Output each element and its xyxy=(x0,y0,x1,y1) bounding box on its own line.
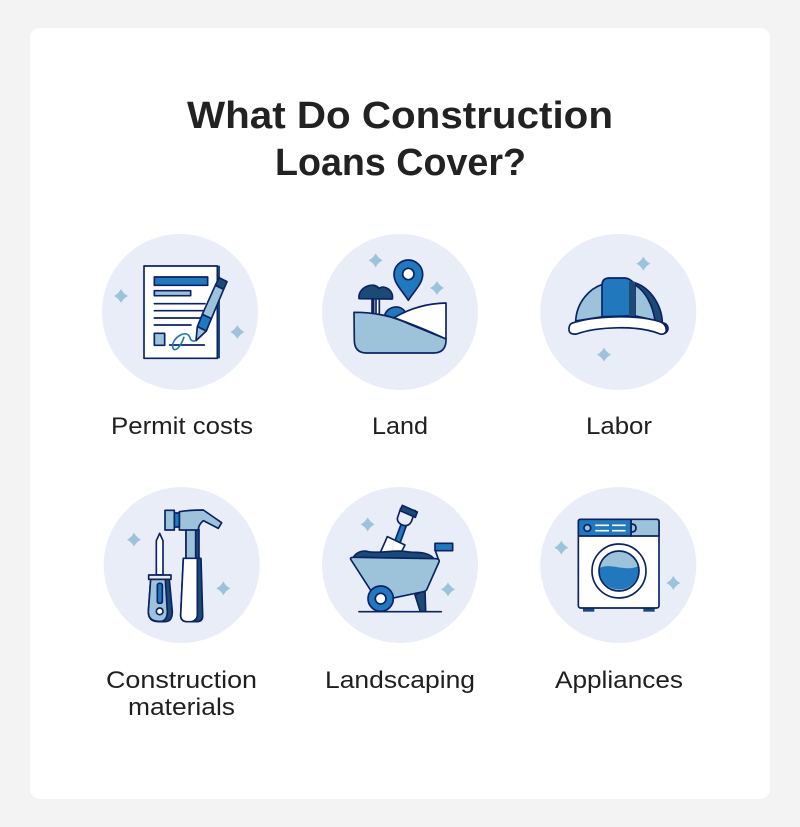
label: Permit costs xyxy=(111,413,253,440)
title xyxy=(187,95,613,184)
icon: wheelbarrow and shovel xyxy=(322,487,478,643)
label: Landscaping xyxy=(325,667,475,694)
icon: hammer and screwdriver xyxy=(104,487,260,643)
panel: permit costs xyxy=(102,234,258,440)
label: Labor xyxy=(586,413,652,440)
icon: hard hat xyxy=(540,234,696,390)
panel: labor xyxy=(540,234,696,440)
label: Land xyxy=(372,413,428,440)
icon: washing machine xyxy=(540,487,696,643)
title: Loans Cover? xyxy=(275,142,526,184)
label: Appliances xyxy=(555,667,683,694)
label: materials xyxy=(128,694,235,721)
icon: permit document xyxy=(102,234,258,390)
panel: appliances xyxy=(540,487,696,694)
panel: construction materials xyxy=(104,487,260,721)
panel: landscaping xyxy=(322,487,478,694)
icon: land with location pin xyxy=(322,234,478,390)
title: What Do Construction xyxy=(187,95,613,137)
label: Construction xyxy=(106,667,257,694)
label xyxy=(106,667,257,721)
panel: land xyxy=(322,234,478,440)
